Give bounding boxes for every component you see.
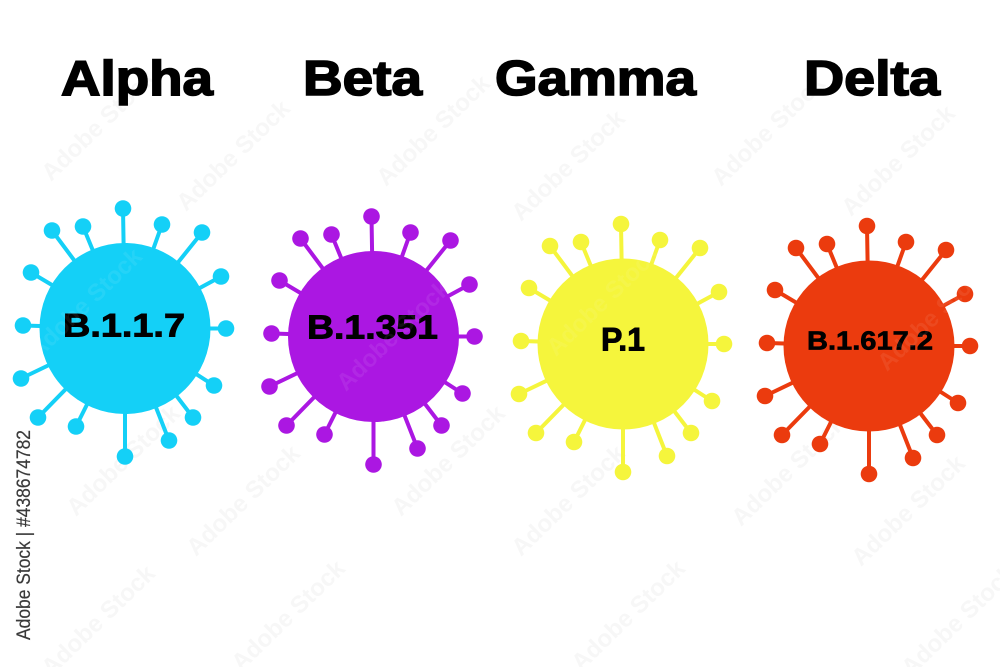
watermark pattern: Adobe Stock [506, 440, 631, 561]
watermark pattern: Adobe Stock [181, 440, 306, 561]
virus: Gamma P.1 [511, 216, 732, 480]
watermark pattern: Adobe Stock [836, 100, 961, 221]
title: Gamma: Gamma [495, 52, 697, 106]
watermark over circles: Adobe Stock [23, 243, 148, 364]
watermark pattern: Adobe Stock [371, 70, 496, 191]
virus: Delta B.1.617.2 [757, 218, 978, 482]
label: B.1.1.7: B.1.1.7 [63, 308, 185, 344]
watermark over circles: Adobe Stock [331, 275, 456, 396]
virus: Beta B.1.351 [261, 208, 483, 473]
watermark over circles: Adobe Stock [872, 255, 997, 376]
watermark pattern: Adobe Stock [171, 95, 296, 216]
title: Alpha: Alpha [61, 52, 214, 106]
label: B.1.351: B.1.351 [307, 308, 438, 346]
watermark pattern: Adobe Stock [726, 410, 851, 531]
watermark pattern: Adobe Stock [846, 450, 971, 571]
virus: Alpha B.1.1.7 [13, 200, 234, 465]
watermark pattern: Adobe Stock [706, 70, 831, 191]
title: Delta: Delta [804, 52, 941, 106]
watermark pattern: Adobe Stock [506, 105, 631, 226]
watermark pattern: Adobe Stock [36, 65, 161, 186]
watermark over circles [23, 240, 997, 396]
title: Beta: Beta [303, 52, 423, 106]
watermark pattern: Adobe Stock [386, 400, 511, 521]
vertical stock id text: Adobe Stock | #438674782 [14, 430, 35, 640]
watermark pattern: Adobe Stock [61, 400, 186, 521]
label: B.1.617.2: B.1.617.2 [807, 326, 933, 356]
watermark over circles: Adobe Stock [541, 240, 666, 361]
label: P.1: P.1 [601, 322, 645, 358]
